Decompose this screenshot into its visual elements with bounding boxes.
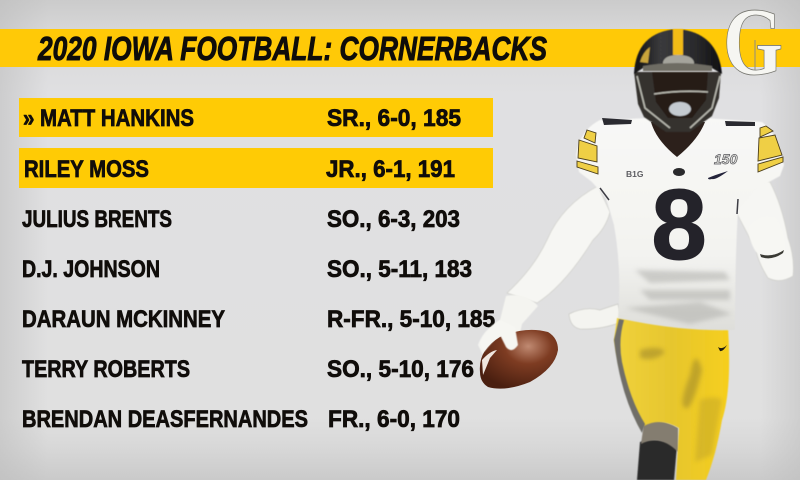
row: Riley Moss: JR., 6-1, 191 [326,156,455,183]
jersey [576,118,784,330]
jersey number: 8 [651,169,707,281]
left sleeve stripes [577,130,598,174]
row: Julius Brents [22,206,460,233]
big ten logo: B1G [626,169,644,179]
player illustration [478,29,793,480]
row: Julius Brents: JULIUS BRENTS [22,206,172,233]
mouthpiece [669,102,691,116]
row: Matt Hankins: » MATT HANKINS [23,105,194,132]
title banner [0,29,800,67]
row: D.J. Johnson: SO., 5-11, 183 [327,256,472,283]
row: Daraun McKinney [22,306,495,333]
sock [637,440,677,480]
right glove [749,216,785,255]
left arm [507,186,610,303]
football stripes [482,350,497,375]
shoulder numbers [602,118,755,126]
face [652,72,708,118]
helmet [634,29,722,132]
row: Matt Hankins: SR., 6-0, 185 [327,105,461,132]
row: Brendan Deasfernandes: BRENDAN DEASFERNANDES [22,406,308,433]
row: D.J. Johnson: D.J. JOHNSON [22,256,160,283]
knee [641,421,678,452]
shell [634,29,722,74]
jersey folds [625,270,732,324]
brow [663,55,694,66]
row: Terry Roberts [22,356,474,383]
row: Terry Roberts: TERRY ROBERTS [22,356,190,383]
row: Terry Roberts: SO., 5-10, 176 [327,356,474,383]
row: D.J. Johnson [22,256,472,283]
hawk logo [673,168,685,176]
cage bars [637,76,720,128]
pants stripe [614,319,645,433]
title: 2020 IOWA FOOTBALL: CORNERBACKS [37,30,547,67]
facemask backing [634,72,721,132]
150 patch: 150 [714,151,738,167]
left glove [478,295,538,355]
pants swoosh [718,345,727,351]
pants [614,318,729,480]
row: Daraun McKinney: R-FR., 5-10, 185 [327,306,495,333]
helmet gold stripe [673,29,683,55]
pants shadow [640,348,722,462]
helmet side gold [640,47,650,63]
underarm shadows [600,188,738,214]
nike swoosh [708,171,728,179]
row: Brendan Deasfernandes: FR., 6-0, 170 [328,406,460,433]
trailing hand [569,304,622,329]
right wristband [760,250,784,258]
row: Julius Brents: SO., 6-3, 203 [327,206,460,233]
row: Riley Moss [19,148,493,188]
visor band [643,63,712,71]
neck [651,122,705,157]
right arm [735,176,793,281]
row: Riley Moss: RILEY MOSS [24,156,149,183]
right sleeve stripes [758,126,783,172]
football [480,330,558,389]
row: Matt Hankins [19,98,493,137]
fingers on ball [480,320,518,352]
row: Daraun McKinney: DARAUN MCKINNEY [22,306,225,333]
